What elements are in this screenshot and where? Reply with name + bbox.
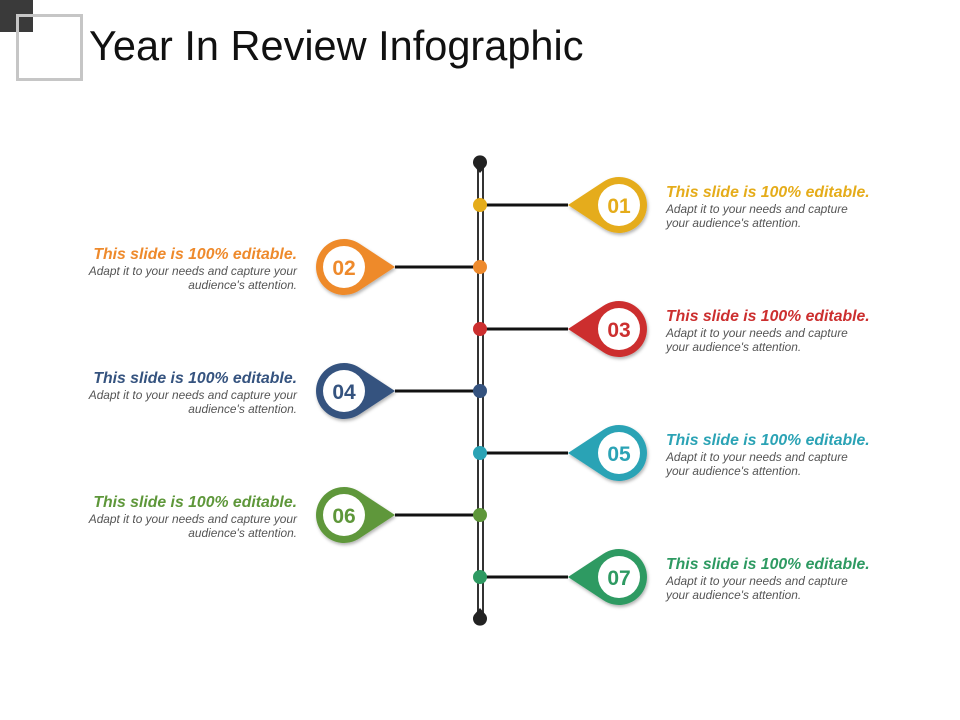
item 04: audience's attention. — [188, 402, 297, 416]
item 07 — [473, 549, 870, 605]
item 05: This slide is 100% editable. — [666, 432, 870, 449]
item 05: 05 — [607, 443, 631, 466]
item 02: This slide is 100% editable. — [93, 246, 297, 263]
item 02: audience's attention. — [188, 278, 297, 292]
item 06: audience's attention. — [188, 526, 297, 540]
item 01: This slide is 100% editable. — [666, 184, 870, 201]
item 04: 04 — [332, 381, 356, 404]
item 02 — [88, 239, 487, 295]
item 03 — [473, 301, 870, 357]
item 03: This slide is 100% editable. — [666, 308, 870, 325]
item 04: Adapt it to your needs and capture your — [88, 388, 298, 402]
item 05: your audience's attention. — [665, 464, 801, 478]
item 07: 07 — [607, 567, 631, 590]
item 07: This slide is 100% editable. — [666, 556, 870, 573]
item 06: Adapt it to your needs and capture your — [88, 512, 298, 526]
item 07: Adapt it to your needs and capture — [665, 574, 848, 588]
item 06 — [88, 487, 487, 543]
item 03: 03 — [607, 319, 631, 342]
item 02: Adapt it to your needs and capture your — [88, 264, 298, 278]
item 06: 06 — [332, 505, 356, 528]
item 02: 02 — [332, 257, 356, 280]
item 03: your audience's attention. — [665, 340, 801, 354]
timeline spine — [473, 155, 487, 626]
item 07: your audience's attention. — [665, 588, 801, 602]
item 06: This slide is 100% editable. — [93, 494, 297, 511]
item 04: This slide is 100% editable. — [93, 370, 297, 387]
item 01: your audience's attention. — [665, 216, 801, 230]
item 05: Adapt it to your needs and capture — [665, 450, 848, 464]
item 05 — [473, 425, 870, 481]
item 01: Adapt it to your needs and capture — [665, 202, 848, 216]
item 01: 01 — [607, 195, 631, 218]
item 04 — [88, 363, 487, 419]
title: Year In Review Infographic — [89, 22, 583, 69]
logo mark — [0, 0, 82, 80]
item 03: Adapt it to your needs and capture — [665, 326, 848, 340]
item 01 — [473, 177, 870, 233]
